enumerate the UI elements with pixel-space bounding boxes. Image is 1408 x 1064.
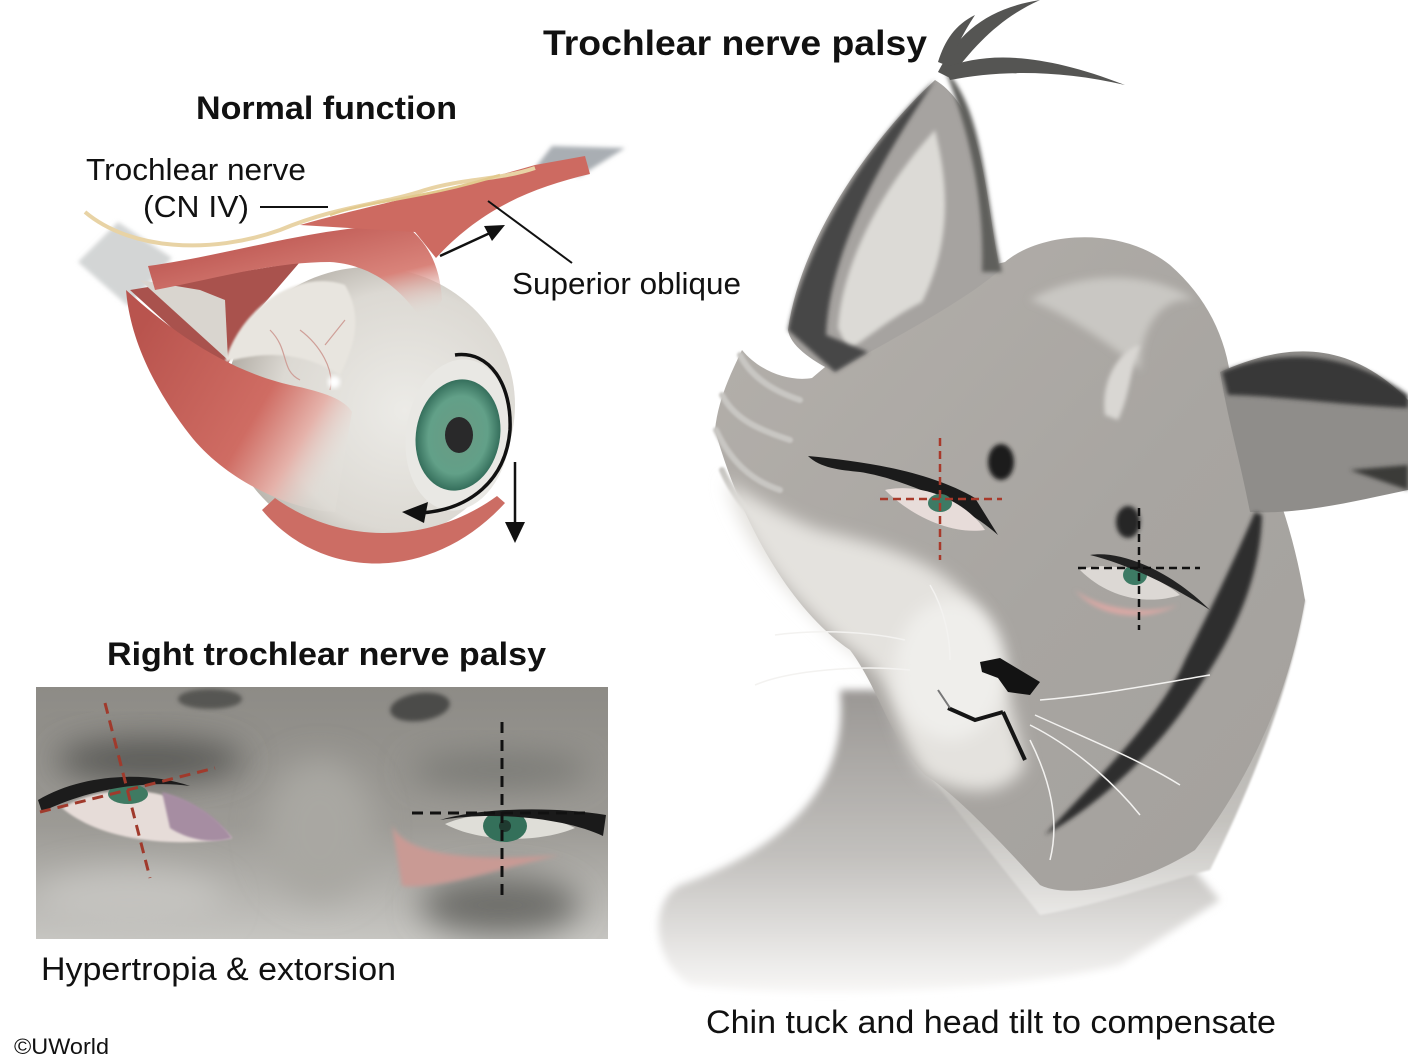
tendon end [535, 146, 625, 176]
label: trochlear nerve: Trochlear nerve [86, 152, 306, 187]
illustration: head with compensating tilt [659, 0, 1408, 992]
illustration: eyeball anatomy [78, 146, 625, 564]
crosshair: black [1078, 508, 1200, 630]
superior oblique tendon [300, 156, 590, 258]
cornea [396, 353, 520, 517]
arrow: rotation around cornea [402, 355, 510, 523]
left eye [808, 456, 998, 535]
panel: eyes [35, 687, 608, 939]
label: superior oblique [488, 201, 741, 301]
right eye [1075, 554, 1210, 616]
vessels [270, 320, 345, 390]
superior muscle [148, 225, 442, 325]
muzzle [895, 600, 1005, 740]
back muscle [130, 262, 300, 370]
optic nerve stub [78, 222, 172, 306]
label: trochlear nerve: (CN IV) [143, 189, 249, 224]
crosshair: black [412, 722, 592, 902]
heading: normal function: Normal function [196, 90, 457, 126]
dark stripe [1045, 512, 1262, 835]
ear tuft [938, 0, 1125, 85]
neck [659, 690, 1220, 992]
arrow: muscle pull [440, 225, 505, 256]
arrow: downward movement [505, 462, 525, 543]
crosshair: red [880, 438, 1002, 560]
whiskers [755, 585, 1210, 860]
globe [225, 267, 515, 543]
brow spot [1116, 506, 1140, 538]
lateral muscle [126, 290, 352, 512]
left eye [38, 777, 232, 842]
inferior muscle [262, 496, 505, 564]
forehead spot [988, 444, 1014, 480]
iris [407, 373, 509, 497]
forehead light fur [1030, 278, 1195, 370]
caption: hypertropia: Hypertropia & extorsion [41, 951, 396, 987]
ear left [788, 80, 1000, 372]
left fur spikes [716, 355, 800, 540]
highlight [328, 376, 340, 388]
heading: right trochlear nerve palsy: Right trochlear nerve palsy [107, 636, 546, 672]
right eye [392, 809, 606, 886]
ear right [1220, 351, 1408, 512]
credit: ©UWorld [14, 1034, 109, 1059]
label: trochlear nerve [86, 152, 328, 224]
nose [980, 658, 1040, 695]
lower fur [905, 600, 1305, 915]
head fur [715, 237, 1305, 891]
nerve [85, 168, 535, 245]
crosshair: red [40, 703, 215, 878]
mouth [938, 690, 1025, 760]
caption: chin tuck: Chin tuck and head tilt to compensate [706, 1004, 1276, 1040]
label: superior oblique: Superior oblique [512, 266, 741, 301]
cheek light fur [725, 480, 1025, 791]
title: Trochlear nerve palsy [543, 24, 928, 63]
pupil [445, 417, 473, 453]
brow marks [178, 689, 242, 709]
